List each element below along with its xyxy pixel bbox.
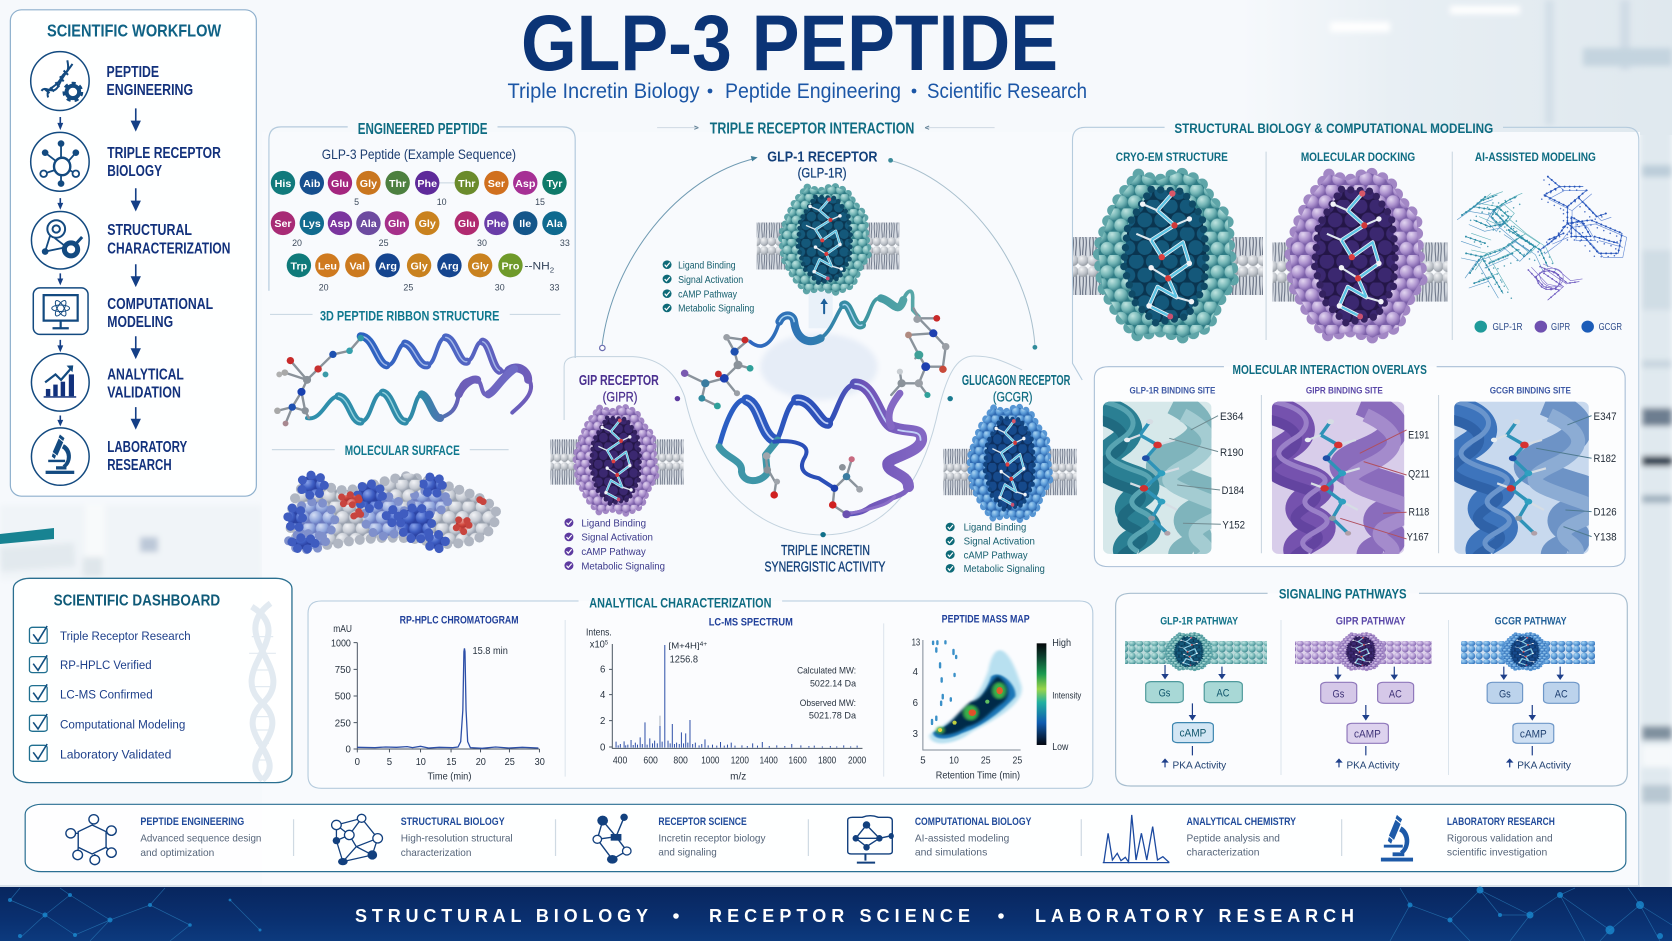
binding site: GLP-1R: R190 [1220,446,1244,459]
chart: RP-HPLC chromatogram: 20 [476,756,486,767]
chart: LC-MS spectrum: 1000 [701,754,719,766]
chart: peptide mass map: 25 [981,754,991,766]
chart: peptide mass map: 10 [949,754,959,766]
chart: RP-HPLC chromatogram: 0 [355,756,360,767]
amino acid sequence: 20 [319,283,329,292]
amino acid sequence: Val [350,260,365,272]
item: analytical chemistry: characterization [1187,846,1260,858]
binding site: GCGR: Y138 [1594,530,1617,543]
amino acid sequence: Thr [389,178,406,190]
dashboard checklist: Computational Modeling [60,718,185,731]
heading: 3D peptide ribbon structure: 3D PEPTIDE RIBBON STRUCTURE [320,309,499,325]
chart: RP-HPLC chromatogram: Time (min) [427,770,471,782]
amino acid sequence: Trp [291,260,308,272]
heading: glucagon receptor: GLUCAGON RECEPTOR [962,373,1071,389]
step: structural characterization [31,212,230,269]
chart: LC-MS spectrum: 2 [600,715,605,726]
panel: molecular interaction overlays: GIPR BINDING SITE [1306,386,1383,396]
amino acid sequence: 10 [437,197,447,207]
amino acid sequence: Asp [515,178,536,190]
binding site: GLP-1R [1102,402,1245,554]
chart: LC-MS spectrum: 1256.8 [670,654,698,665]
amino acid sequence: Asp [330,218,351,230]
binding site: GIPR: Q211 [1408,467,1430,480]
amino acid sequence: 2 [550,266,554,275]
step: laboratory research [31,428,187,485]
chart: RP-HPLC chromatogram: mAU [333,623,352,634]
item: computational biology: AI-assisted modeling [915,833,1009,844]
receptor: GIPR [550,407,684,513]
legend: receptors: GLP-1R [1492,322,1523,333]
pathway: GLP-1R: GLP-1R PATHWAY [1160,615,1238,627]
item: laboratory research [1381,815,1555,861]
chart: LC-MS spectrum: 6 [600,664,605,675]
chart: RP-HPLC chromatogram: 15 [446,756,456,767]
amino acid sequence: Arg [378,260,397,272]
chart: LC-MS spectrum: 1400 [760,754,778,766]
amino acid sequence: Leu [318,260,337,272]
amino acid sequence: Gly [419,218,436,230]
chart: LC-MS spectrum: 1200 [731,754,749,766]
amino acid sequence: 15 [535,197,545,207]
heading: scientific workflow: SCIENTIFIC WORKFLOW [47,21,222,41]
chart: peptide mass map: 5 [920,754,926,766]
binding site: GLP-1R: D184 [1222,484,1244,497]
panel: scientific workflow [10,10,256,496]
pathway: GLP-1R: AC [1217,688,1229,700]
receptor: molecular docking [1273,172,1447,338]
binding site: GCGR [1454,402,1616,554]
heading: signaling pathways: SIGNALING PATHWAYS [1279,586,1407,601]
amino acid sequence: 33 [560,238,570,248]
chart: RP-HPLC chromatogram: 10 [416,756,426,767]
amino acid sequence: 25 [403,283,413,292]
item: laboratory research: Rigorous validation and [1447,833,1553,844]
checklist: GCGR: cAMP Pathway [964,550,1029,561]
receptor: GLP-1R [757,186,899,292]
item: computational biology: COMPUTATIONAL BIOLOGY [915,816,1032,828]
amino acid sequence [271,171,570,292]
amino acid sequence: Lys [303,218,321,230]
step: peptide engineering [31,52,193,111]
pathway: GCGR: PKA Activity [1517,760,1571,771]
chart: LC-MS spectrum: 800 [673,754,688,766]
item: peptide engineering: PEPTIDE ENGINEERING [140,816,244,828]
step: analytical validation: VALIDATION [107,383,181,401]
label: GIPR: (GIPR) [603,390,637,405]
panel: analytical characterization: ANALYTICAL CHARACTERIZATION [589,595,771,610]
chart: LC-MS spectrum: LC-MS SPECTRUM [709,616,793,628]
legend: receptors: GIPR [1551,322,1570,333]
chart: LC-MS spectrum: 4 [600,689,606,700]
amino acid sequence: Gly [410,260,428,272]
binding site: GCGR: D126 [1594,505,1617,518]
heading: cryo-EM: CRYO-EM STRUCTURE [1116,151,1228,164]
step: laboratory research: RESEARCH [107,456,172,474]
binding site: GCGR: E347 [1594,410,1617,423]
text: LABORATORY RESEARCH [1447,816,1555,828]
panel: scientific dashboard [13,578,292,783]
binding site: GCGR: R182 [1594,452,1616,465]
step: computational modeling: COMPUTATIONAL [107,295,213,313]
chart: RP-HPLC chromatogram: 500 [335,691,351,702]
pathway: GLP-1R: Gs [1159,688,1170,700]
chart: LC-MS spectrum: 600 [643,754,658,766]
checklist: GIPR: Ligand Binding [581,518,646,529]
panel: molecular interaction overlays [1094,363,1625,575]
chart: peptide mass map: PEPTIDE MASS MAP [942,614,1030,626]
step: analytical validation [31,354,184,411]
dashboard checklist [29,626,191,761]
amino acid sequence: Ile [519,218,531,230]
item: structural biology: characterization [401,847,471,858]
checklist: GIPR: Metabolic Signaling [581,561,665,572]
amino acid sequence: Glu [331,178,349,190]
pathway: GCGR: AC [1555,688,1568,700]
heading: molecular docking: MOLECULAR DOCKING [1301,151,1415,164]
checklist: GLP-1R: Ligand Binding [678,260,736,271]
chart: LC-MS spectrum: [M+4H] [669,642,714,651]
amino acid sequence: Tyr [547,178,562,190]
chart: RP-HPLC chromatogram: 250 [335,717,351,729]
panel: molecular interaction overlays: GCGR BINDING SITE [1490,386,1571,396]
binding site: GLP-1R: Y152 [1222,519,1245,531]
amino acid sequence: Ala [546,218,563,230]
chart: RP-HPLC chromatogram: 0 [346,744,351,755]
pathway: GLP-1R: cAMP [1180,728,1206,740]
amino acid sequence: Phe [487,218,506,230]
label: GLP-1R: (GLP-1R) [798,166,847,182]
item: receptor science: and signaling [658,846,717,858]
amino acid sequence: --NH [525,261,548,273]
label: GCGR: (GCGR) [993,390,1032,405]
amino acid sequence: 20 [292,238,302,248]
checklist: GLP-1R: Metabolic Signaling [678,304,754,315]
subtitle: Peptide Engineering [725,80,901,103]
panel: molecular interaction overlays: GLP-1R BINDING SITE [1129,386,1216,396]
heading: example sequence: GLP-3 Peptide (Example Sequence) [322,147,516,162]
chart: peptide mass map: High [1052,637,1071,648]
dashboard checklist: RP-HPLC Verified [60,659,152,672]
chart: peptide mass map: Intensity [1052,690,1081,701]
checklist: GLP-1R: cAMP Pathway [678,289,738,300]
chart: LC-MS spectrum: 1800 [818,754,836,766]
chart: peptide mass map: 6 [913,697,918,708]
step: peptide engineering: ENGINEERING [107,81,193,99]
chart: peptide mass map: Retention Time (min) [936,769,1020,781]
amino acid sequence: Ser [488,178,505,190]
receptor: GCGR [944,407,1076,519]
pathway: GIPR: Gs [1333,688,1344,700]
item: structural biology: High-resolution structural [401,833,513,844]
heading: scientific dashboard: SCIENTIFIC DASHBOARD [54,591,220,609]
amino acid sequence: 5 [354,197,359,207]
pathway: GCGR: cAMP [1520,728,1547,740]
chart: RP-HPLC chromatogram: 25 [505,756,515,767]
research areas strip: right items [848,815,1555,863]
item: receptor science: Incretin receptor biology [658,833,766,844]
footer banner [0,885,1672,941]
chart: RP-HPLC chromatogram: 15.8 min [472,645,508,656]
pathway: GIPR: PKA Activity [1346,760,1400,771]
checklist: GLP-1R [663,260,754,315]
heading: GIP receptor: GIP RECEPTOR [579,373,659,389]
pathway: GLP-1R: PKA Activity [1173,760,1226,771]
checklist: GIPR: Signal Activation [581,533,653,544]
chart: peptide mass map: Low [1052,741,1069,752]
amino acid sequence: Aib [303,178,321,190]
chart: LC-MS spectrum: 4+ [700,641,707,647]
checklist: GCGR: Signal Activation [964,537,1035,548]
checklist: GCGR: Metabolic Signaling [964,564,1045,575]
checklist: GIPR: cAMP Pathway [581,547,647,558]
item: computational biology: and simulations [915,846,988,858]
chart: RP-HPLC chromatogram: 5 [387,756,392,767]
chart: LC-MS spectrum: 400 [613,754,627,766]
heading: engineered peptide: ENGINEERED PEPTIDE [358,121,488,138]
chart: LC-MS spectrum: 5021.78 Da [809,710,856,721]
legend: receptors: GCGR [1599,322,1622,333]
legend: receptors [1474,321,1622,333]
AI-assisted molecular model [1457,177,1627,300]
binding site: GLP-1R: E364 [1220,410,1244,423]
item: analytical chemistry: ANALYTICAL CHEMISTRY [1187,816,1296,828]
checklist: GIPR [564,518,665,572]
heading: AI-assisted modeling: AI-ASSISTED MODELING [1475,151,1596,164]
chart: LC-MS spectrum: 5022.14 Da [810,678,856,689]
pathway: GIPR: GIPR PATHWAY [1336,615,1406,627]
amino acid sequence: Gly [360,178,377,190]
amino acid sequence: Ser [274,218,292,230]
chart: peptide mass map [884,614,1081,781]
subtitle: Scientific Research [927,80,1087,103]
chart: LC-MS spectrum: 0 [600,741,605,753]
heading: GLP-1 receptor: GLP-1 RECEPTOR [767,150,878,166]
chart: peptide mass map: 4 [913,666,918,677]
amino acid sequence: 33 [550,283,560,292]
caption: triple incretin synergistic activity: TRIPLE INCRETIN [781,543,870,559]
decoration: faded DNA helix [249,603,276,780]
amino acid sequence: Arg [440,260,459,272]
item: peptide engineering: and optimization [140,847,214,858]
chart: LC-MS spectrum: 1600 [789,754,807,766]
panel: research areas strip [25,804,1626,872]
step: computational modeling [33,288,213,334]
amino acid sequence: Phe [417,178,437,190]
chart: peptide mass map: 13 [912,636,920,648]
molecular surface model [288,473,496,550]
item: receptor science: RECEPTOR SCIENCE [658,816,747,828]
pathway: GLP-1R [1146,615,1242,771]
amino acid sequence: Glu [458,218,476,230]
amino acid sequence: Ala [360,218,377,230]
chart: RP-HPLC chromatogram [331,614,545,782]
chart: RP-HPLC chromatogram: 1000 [331,638,351,649]
footer text: RECEPTOR SCIENCE [709,906,970,926]
amino acid sequence: His [275,178,291,190]
item: laboratory research: scientific investigation [1447,846,1547,858]
binding site: GIPR [1272,402,1430,554]
panel: signaling pathways [1116,586,1627,786]
amino acid sequence: Gln [388,218,406,230]
step: analytical validation: ANALYTICAL [107,366,184,383]
checklist: GLP-1R: Signal Activation [678,275,743,286]
chart: RP-HPLC chromatogram: 750 [335,664,351,675]
step: triple receptor biology [31,132,221,191]
pathway membrane: GIPR [1295,633,1432,670]
heading: molecular surface: MOLECULAR SURFACE [345,443,460,458]
workflow arrows [57,108,141,430]
chart: LC-MS spectrum: m/z [730,770,746,782]
chart: LC-MS spectrum: Calculated MW: [797,665,856,676]
central triple incretin ribbon [681,291,949,518]
footer text [355,906,1354,926]
chart: LC-MS spectrum: x10 [590,638,616,650]
subtitle: Triple Incretin Biology [508,80,700,103]
panel: triple receptor interaction [564,121,1071,575]
3D peptide ribbon [274,335,531,426]
item: peptide engineering: Advanced sequence design [140,833,261,844]
subtitle [508,80,1087,103]
pathway: GIPR: cAMP [1354,728,1381,740]
pathway: GCGR [1487,615,1579,771]
step: computational modeling: MODELING [107,313,173,331]
panel: structural biology and computational modeling [1072,121,1639,887]
footer molecular network [10,888,1672,941]
amino acid sequence: Thr [458,178,475,190]
chart: RP-HPLC chromatogram: RP-HPLC CHROMATOGRAM [400,614,519,626]
caption: triple incretin synergistic activity [765,543,885,575]
binding site: GIPR: Y167 [1407,531,1429,543]
binding site: GIPR: E191 [1408,428,1429,441]
item: receptor science [593,814,766,864]
step: structural characterization: CHARACTERIZATION [107,239,230,257]
step: peptide engineering: PEPTIDE [107,63,159,81]
chart: LC-MS spectrum: Intens. [586,626,612,638]
dashboard checklist: Triple Receptor Research [60,630,191,643]
checklist: GCGR: Ligand Binding [964,523,1026,534]
step: laboratory research: LABORATORY [107,438,187,456]
step: triple receptor biology: BIOLOGY [107,162,162,180]
checklist: GCGR [946,523,1045,575]
item: computational biology [848,816,1032,863]
amino acid sequence: Gly [471,260,489,272]
footer text: STRUCTURAL BIOLOGY [355,906,648,926]
pathway: GIPR [1321,615,1414,771]
panel: analytical characterization [308,595,1093,788]
panel: engineered peptide [269,121,575,550]
heading: structural biology: STRUCTURAL BIOLOGY & COMPUTATIONAL MODELING [1174,121,1493,137]
item: analytical chemistry: Peptide analysis and [1187,833,1280,844]
binding site: GIPR: R118 [1409,505,1429,518]
item: analytical chemistry [1103,815,1296,863]
panel: molecular interaction overlays: MOLECULAR INTERACTION OVERLAYS [1233,363,1427,377]
item: structural biology [332,814,513,865]
connection arcs [564,126,1037,537]
caption: triple incretin synergistic activity: SYNERGISTIC ACTIVITY [765,559,885,575]
item: peptide engineering [66,815,261,865]
chart: LC-MS spectrum: Observed MW: [800,698,856,708]
chart: RP-HPLC chromatogram: 30 [535,756,545,767]
item: structural biology: STRUCTURAL BIOLOGY [401,816,505,828]
amino acid sequence: 25 [379,238,389,248]
heading: triple receptor interaction: TRIPLE RECEPTOR INTERACTION [710,121,914,137]
chart: peptide mass map: 25 [1013,754,1022,766]
chart: peptide mass map: 3 [913,728,918,739]
pathway membrane: GLP-1R [1125,633,1267,670]
pathway: GIPR: AC [1389,688,1402,700]
pathway: GCGR: GCGR PATHWAY [1495,615,1567,627]
pathway: GCGR: Gs [1499,688,1511,700]
footer text: LABORATORY RESEARCH [1035,906,1354,926]
title: GLP-3 PEPTIDE [521,0,1058,87]
chart: LC-MS spectrum: 2000 [848,754,866,766]
dashboard checklist: Laboratory Validated [60,748,171,761]
step: structural characterization: STRUCTURAL [107,221,192,239]
receptor: cryo-EM structure [1073,172,1263,338]
dashboard checklist: LC-MS Confirmed [60,688,153,701]
amino acid sequence: 30 [477,238,487,248]
step: triple receptor biology: TRIPLE RECEPTOR [107,144,221,162]
chart: LC-MS spectrum [586,616,866,782]
amino acid sequence: 30 [495,283,505,292]
pathway membrane: GCGR [1461,633,1595,670]
amino acid sequence: Pro [502,260,520,272]
chart: LC-MS spectrum: 5 [605,639,608,646]
